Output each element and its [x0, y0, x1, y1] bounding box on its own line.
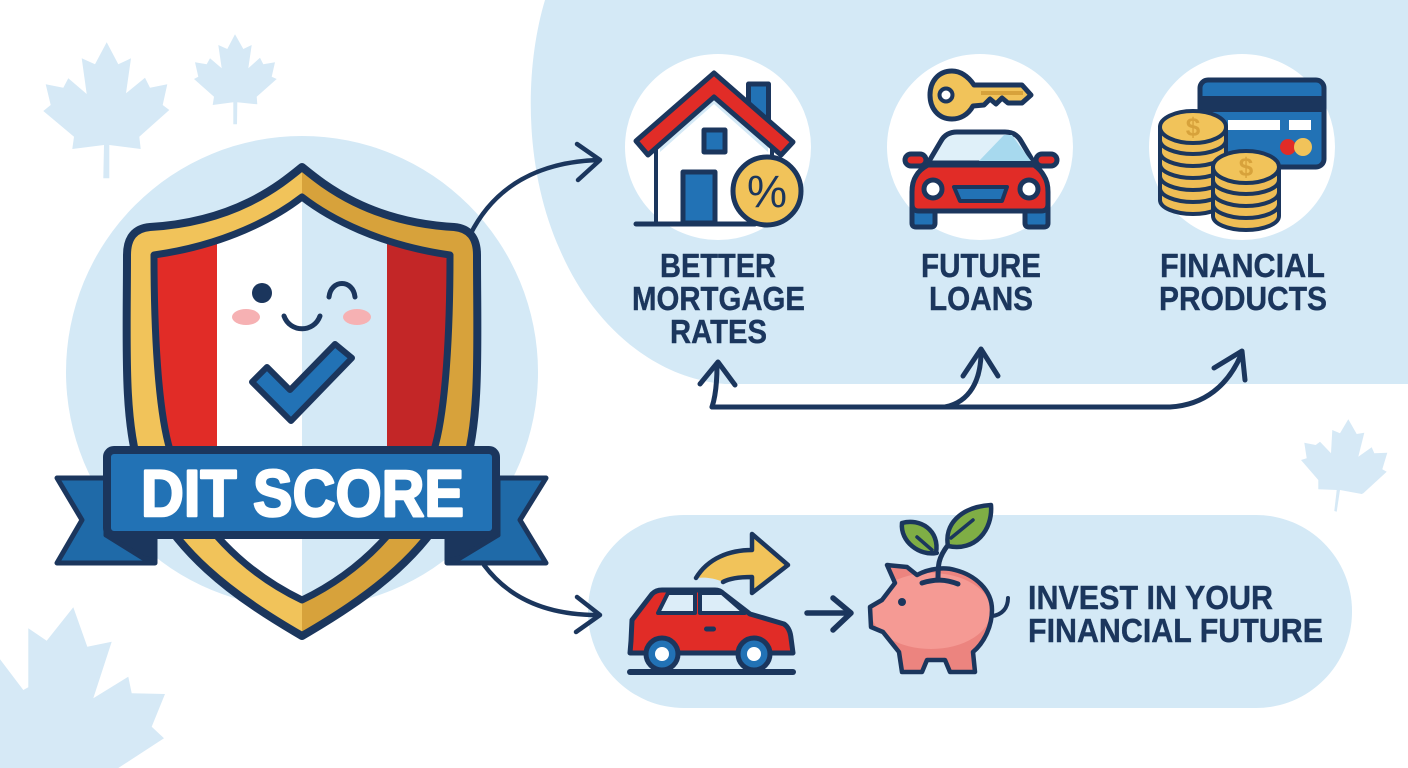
shield inner stripes	[150, 190, 454, 610]
icon: yellow curved arrow	[696, 534, 788, 593]
ribbon tails	[57, 478, 546, 563]
arrows: branching benefits connector	[700, 349, 1245, 407]
panel: top benefits background	[531, 0, 1408, 384]
shield check mark	[252, 344, 352, 421]
backdrop circle behind shield	[66, 136, 538, 608]
invest illustration	[630, 505, 1323, 672]
icon: left coin stack	[1160, 111, 1226, 214]
icon: key	[930, 71, 1031, 119]
label: INVEST IN YOUR	[1028, 579, 1273, 616]
label	[1028, 579, 1323, 649]
icon circle	[887, 54, 1073, 240]
icon: maple leaf bottom left	[0, 607, 165, 768]
icon: red car side	[630, 590, 793, 672]
shield gold frame	[127, 167, 477, 636]
icon circle	[625, 54, 811, 240]
label: LOANS	[929, 280, 1033, 317]
label: FINANCIAL FUTURE	[1028, 612, 1323, 649]
icon: credit card	[1200, 80, 1324, 167]
label: FUTURE	[921, 247, 1041, 284]
label	[1159, 247, 1327, 317]
label: BETTER	[660, 247, 776, 284]
benefit: financial products	[1149, 54, 1335, 317]
icon: maple leaf right	[1301, 419, 1387, 512]
label	[632, 247, 805, 350]
label: MORTGAGE	[632, 280, 805, 317]
ribbon banner	[107, 450, 496, 535]
label: FINANCIAL	[1160, 247, 1325, 284]
icon: right coin stack: $	[1239, 152, 1254, 182]
arrow: car to piggy bank	[807, 598, 851, 630]
icon: house	[636, 73, 801, 225]
panel: bottom invest pill	[588, 515, 1352, 708]
icon: percent sign: %	[747, 166, 787, 217]
benefit: future loans	[887, 54, 1073, 317]
icon: sprout	[902, 505, 991, 580]
icon: right coin stack	[1213, 151, 1279, 230]
icon circle	[1149, 54, 1335, 240]
arrow: shield to invest pill	[484, 565, 600, 632]
label: RATES	[670, 313, 767, 350]
icon: maple leaf top left	[43, 42, 169, 178]
icon: left coin stack: $	[1186, 112, 1201, 142]
banner text: DIT SCORE	[141, 456, 464, 530]
benefit: better mortgage rates	[625, 54, 811, 350]
icon: piggy bank	[870, 565, 1008, 672]
arrow: shield to benefits	[470, 144, 600, 235]
label: PRODUCTS	[1159, 280, 1327, 317]
label	[921, 247, 1041, 317]
shield face	[232, 283, 371, 329]
icon: red car front	[905, 132, 1057, 227]
icon: maple leaf top centre	[194, 34, 277, 124]
shield badge	[57, 167, 546, 636]
